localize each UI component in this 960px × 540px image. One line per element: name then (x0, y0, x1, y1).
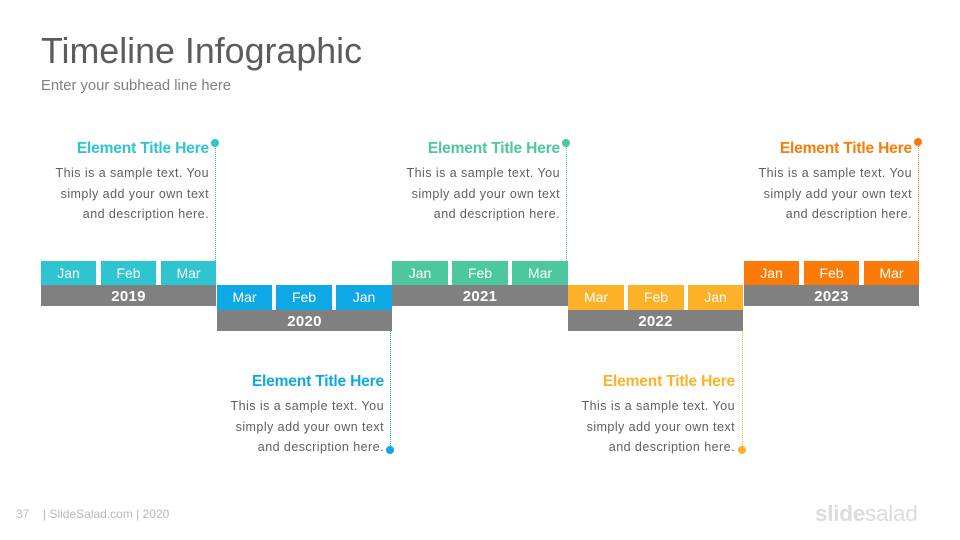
logo: slidesalad: slidesalad (815, 501, 918, 526)
connector: 2022 (742, 331, 743, 450)
connector: 2021 (566, 143, 567, 261)
month: Mar 2021 (512, 261, 568, 285)
month: Feb 2023 (804, 261, 859, 285)
month: Mar 2022: Mar (584, 289, 608, 305)
text block: 2021 element (406, 140, 560, 221)
text block: 2019 element (56, 140, 209, 221)
month: Mar 2020 (217, 285, 272, 310)
element description: simply add your own text (61, 186, 209, 200)
element description (406, 166, 560, 221)
element description: This is a sample text. You (231, 399, 384, 413)
marker dot: 2022 (738, 446, 746, 454)
element description: This is a sample text. You (759, 166, 912, 180)
connector: 2023 (918, 143, 919, 261)
element description: simply add your own text (412, 186, 560, 200)
element description (56, 166, 209, 221)
element description: and description here. (83, 207, 209, 221)
timeline segment: 2020 (217, 285, 392, 331)
text block: 2020 element (230, 373, 384, 454)
year: 2023 (744, 285, 919, 306)
year: 2020 (217, 310, 392, 331)
month: Feb 2021: Feb (468, 265, 492, 281)
marker dot: 2019 (211, 139, 219, 147)
element description: and description here. (434, 207, 560, 221)
year: 2019: 2019 (111, 288, 146, 305)
month: Jan 2022: Jan (704, 289, 727, 305)
month: Feb 2019: Feb (116, 265, 141, 281)
text block: 2022 element (582, 373, 735, 454)
timeline segment: 2022 (568, 285, 743, 331)
timeline segment: 2021 (392, 261, 568, 306)
month: Mar 2019 (161, 261, 216, 285)
element description: and description here. (786, 207, 912, 221)
marker dot: 2020 (386, 446, 394, 454)
element description: simply add your own text (236, 420, 384, 434)
month: Mar 2021: Mar (528, 265, 552, 281)
month: Jan 2021 (392, 261, 448, 285)
month: Feb 2020 (276, 285, 332, 310)
subtitle: Enter your subhead line here (41, 78, 231, 94)
element description: This is a sample text. You (56, 166, 209, 180)
element description: This is a sample text. You (582, 399, 735, 413)
element title: Element Title Here (428, 140, 560, 157)
year: 2021: 2021 (463, 288, 497, 305)
connector: 2019 (215, 143, 216, 261)
element description (230, 399, 384, 454)
element description: and description here. (609, 440, 735, 454)
month: Jan 2019 (41, 261, 96, 285)
element title: Element Title Here (780, 140, 912, 157)
month: Feb 2019 (101, 261, 156, 285)
title: Timeline Infographic (41, 31, 362, 71)
element description (758, 166, 912, 221)
year: 2023: 2023 (814, 288, 849, 305)
month: Mar 2023: Mar (879, 265, 904, 281)
element description (582, 399, 735, 454)
element title: Element Title Here (77, 140, 209, 157)
month: Feb 2021 (452, 261, 508, 285)
element title: Element Title Here (603, 373, 735, 390)
month: Jan 2021: Jan (409, 265, 431, 281)
month: Jan 2022 (688, 285, 743, 310)
month: Jan 2023 (744, 261, 799, 285)
month: Feb 2022 (628, 285, 684, 310)
element description: and description here. (258, 440, 384, 454)
month: Mar 2023 (864, 261, 919, 285)
footer text: | SlideSalad.com | 2020 (43, 507, 169, 521)
element description: simply add your own text (587, 420, 735, 434)
element description: This is a sample text. You (407, 166, 560, 180)
month: Mar 2022 (568, 285, 624, 310)
connector: 2020 (390, 331, 391, 450)
year: 2022: 2022 (638, 313, 673, 330)
month: Jan 2023: Jan (760, 265, 783, 281)
month: Jan 2019: Jan (57, 265, 80, 281)
month: Feb 2022: Feb (644, 289, 668, 305)
element description: simply add your own text (764, 186, 912, 200)
element title: Element Title Here (252, 373, 384, 390)
page number: 37 (16, 507, 29, 521)
month: Feb 2023: Feb (819, 265, 844, 281)
timeline segment: 2023 (744, 261, 919, 306)
month: Mar 2019: Mar (176, 265, 201, 281)
year: 2020: 2020 (287, 313, 322, 330)
year: 2019 (41, 285, 216, 306)
month: Jan 2020 (336, 285, 392, 310)
month: Mar 2020: Mar (232, 289, 257, 305)
year: 2022 (568, 310, 743, 331)
timeline segment: 2019 (41, 261, 216, 306)
month: Feb 2020: Feb (292, 289, 316, 305)
marker dot: 2023 (914, 138, 922, 146)
text block: 2023 element (758, 140, 912, 221)
marker dot: 2021 (562, 139, 570, 147)
month: Jan 2020: Jan (353, 289, 375, 305)
year: 2021 (392, 285, 568, 306)
